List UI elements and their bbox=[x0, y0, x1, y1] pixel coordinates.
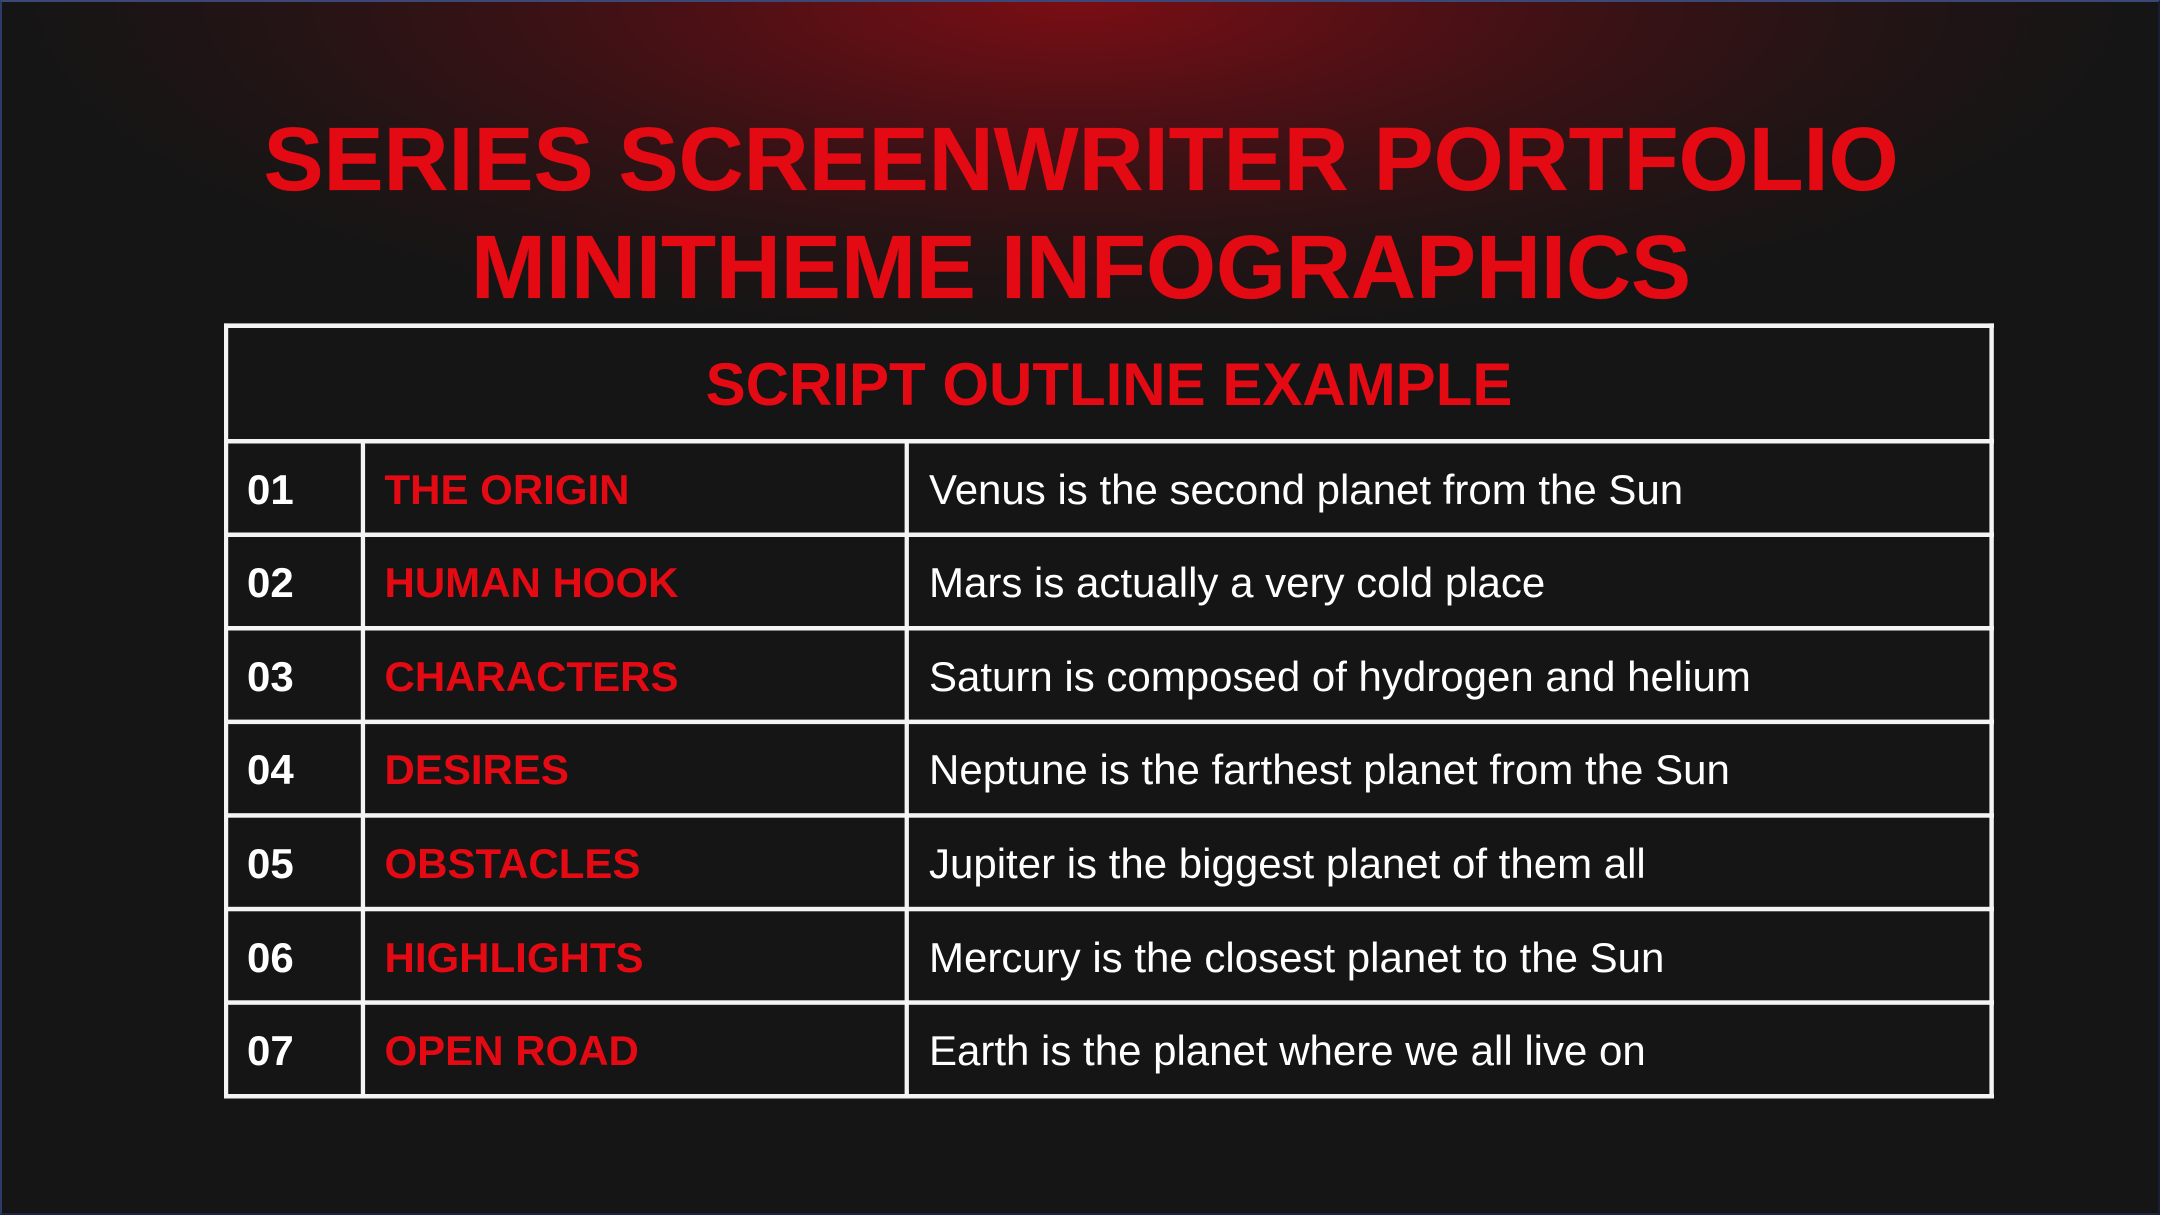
row 06: 06 bbox=[247, 934, 294, 981]
row 04: Neptune is the farthest planet from the Sun bbox=[929, 746, 1730, 793]
row 05: 05 bbox=[247, 840, 294, 887]
table: script outline bbox=[224, 323, 1994, 1098]
row 03 bbox=[247, 653, 1751, 700]
row 05: OBSTACLES bbox=[384, 840, 640, 887]
row 02 bbox=[247, 559, 1545, 606]
row 02: 02 bbox=[247, 559, 294, 606]
row 02: HUMAN HOOK bbox=[384, 559, 678, 606]
row 02: Mars is actually a very cold place bbox=[929, 559, 1545, 606]
row 01: THE ORIGIN bbox=[384, 466, 630, 513]
row 07: OPEN ROAD bbox=[384, 1027, 639, 1074]
title: SERIES SCREENWRITER PORTFOLIO bbox=[263, 110, 1899, 210]
title bbox=[263, 110, 1899, 318]
row 04: DESIRES bbox=[384, 746, 569, 793]
row 05: Jupiter is the biggest planet of them all bbox=[929, 840, 1646, 887]
title: MINITHEME INFOGRAPHICS bbox=[471, 218, 1691, 318]
row 06: HIGHLIGHTS bbox=[384, 934, 644, 981]
row 01 bbox=[247, 466, 1683, 513]
row 03: Saturn is composed of hydrogen and helium bbox=[929, 653, 1751, 700]
row 07: 07 bbox=[247, 1027, 294, 1074]
row 01: Venus is the second planet from the Sun bbox=[929, 466, 1683, 513]
row 06: Mercury is the closest planet to the Sun bbox=[929, 934, 1664, 981]
table heading: SCRIPT OUTLINE EXAMPLE bbox=[706, 351, 1512, 418]
row 01: 01 bbox=[247, 466, 294, 513]
row 04 bbox=[247, 746, 1730, 793]
row 03: 03 bbox=[247, 653, 294, 700]
row 04: 04 bbox=[247, 746, 294, 793]
row 06 bbox=[247, 934, 1664, 981]
row 07 bbox=[247, 1027, 1646, 1074]
row 05 bbox=[247, 840, 1646, 887]
row 03: CHARACTERS bbox=[384, 653, 678, 700]
row 07: Earth is the planet where we all live on bbox=[929, 1027, 1646, 1074]
